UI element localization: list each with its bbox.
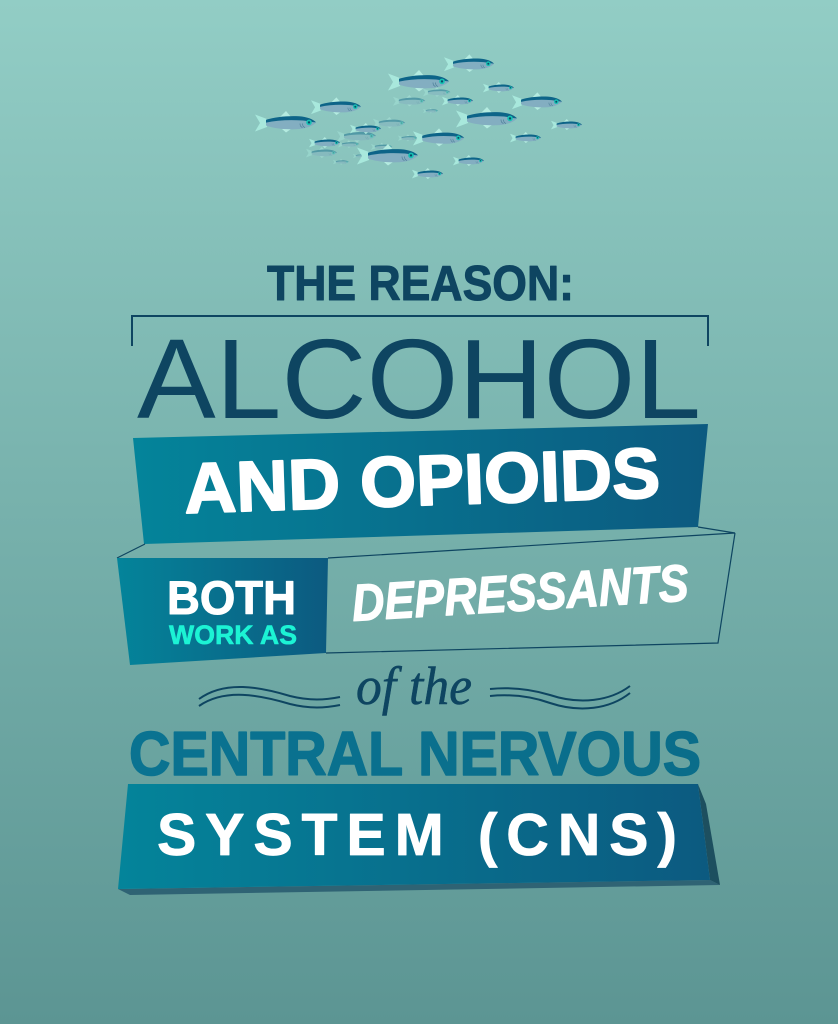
banner: and opioids	[133, 424, 708, 544]
solid fish	[255, 54, 582, 179]
faded fish	[306, 87, 450, 165]
banner: system (cns)	[118, 784, 720, 895]
text: of the: of the	[356, 656, 472, 716]
banner: system (cns): SYSTEM (CNS)	[157, 802, 677, 868]
heading: alcohol: ALCOHOL	[137, 316, 701, 442]
box: depressants	[117, 527, 735, 665]
fish school	[255, 54, 582, 179]
heading: the reason: THE REASON:	[267, 257, 574, 311]
bracket above alcohol	[132, 316, 708, 346]
banner: and opioids: AND OPIOIDS	[183, 434, 661, 529]
wave left	[199, 687, 340, 708]
label: work as: WORK AS	[169, 620, 297, 650]
heading: central nervous: CENTRAL NERVOUS	[129, 720, 701, 789]
wave right	[490, 686, 630, 708]
label: both: BOTH	[167, 571, 296, 624]
label: depressants: DEPRESSANTS	[350, 554, 690, 633]
